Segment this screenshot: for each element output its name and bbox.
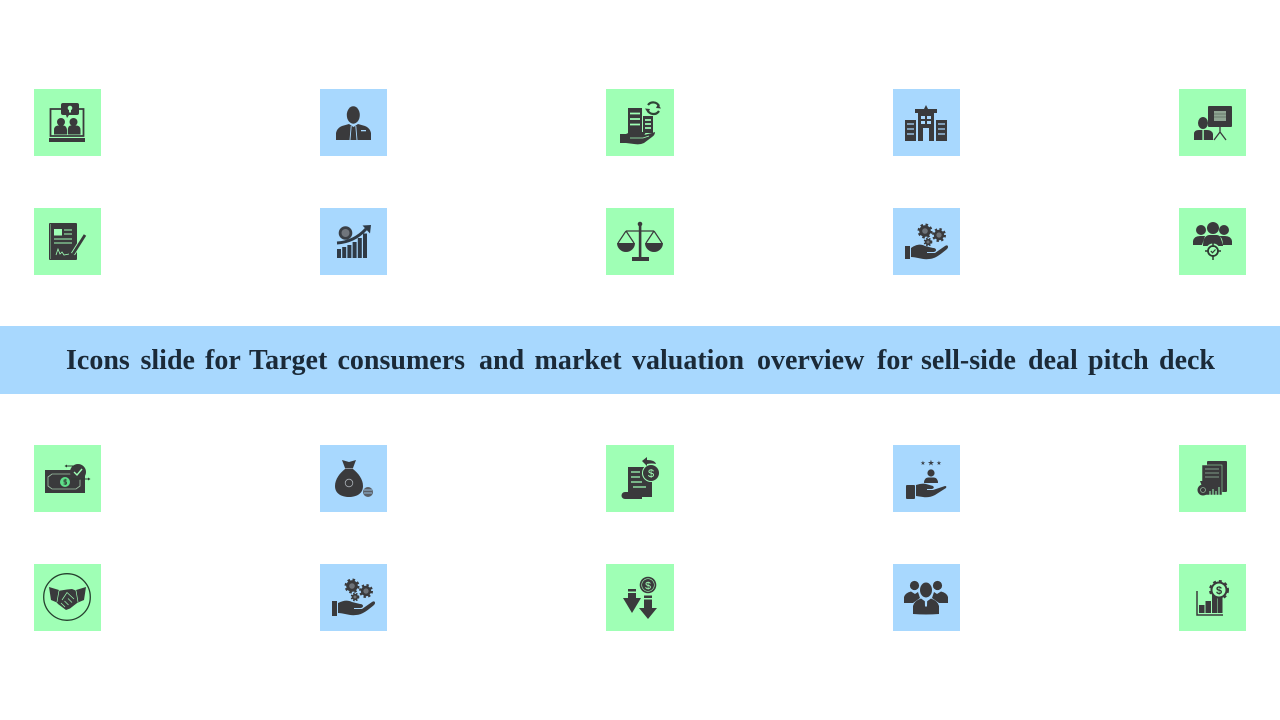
title: for [877,345,913,376]
icon: handshake in circle [34,564,101,631]
icon: falling cost arrows [606,564,674,631]
icon: banknote with check [34,445,101,512]
icon: money bag [320,445,387,512]
title: Icons [66,345,130,376]
title: deal [1028,345,1078,376]
icon: hand with gears variant [320,564,387,631]
title: pitch [1088,345,1149,376]
title [66,345,1215,376]
title: consumers [338,345,465,376]
title band [0,326,1280,394]
title: slide [140,345,195,376]
icon: documents with money bag [1179,445,1246,512]
icon: invoice scroll with dollar [606,445,674,512]
icon: business team [893,564,960,631]
icon: team with target [1179,208,1246,275]
icon: growth chart with coin [320,208,387,275]
icon: businessman [320,89,387,156]
title: for [205,345,241,376]
icon: hand holding rated person: ★ [936,460,942,467]
icon: hand with gears [893,208,960,275]
icon: buildings in hand with refresh [606,89,674,156]
icon: hand holding rated person [893,445,960,512]
icon: bar chart with dollar gear [1179,564,1246,631]
title: valuation [632,345,744,376]
icon: balance scales [606,208,674,275]
icon: laptop meeting [34,89,101,156]
icon: hand holding rated person: ★ [920,460,926,467]
icon: bar chart with dollar gear: $ [1216,585,1222,597]
icon: presenter with board [1179,89,1246,156]
title: deck [1159,345,1215,376]
title: and [479,345,524,376]
icon: signed contract [34,208,101,275]
icon: office buildings [893,89,960,156]
title: market [534,345,622,376]
icon: invoice scroll with dollar: $ [648,468,654,480]
icon: hand holding rated person: ★ [927,458,935,468]
title: overview [757,345,864,376]
title: sell-side [921,345,1016,376]
title: Target [249,345,327,376]
icon: falling cost arrows: $ [645,580,651,592]
